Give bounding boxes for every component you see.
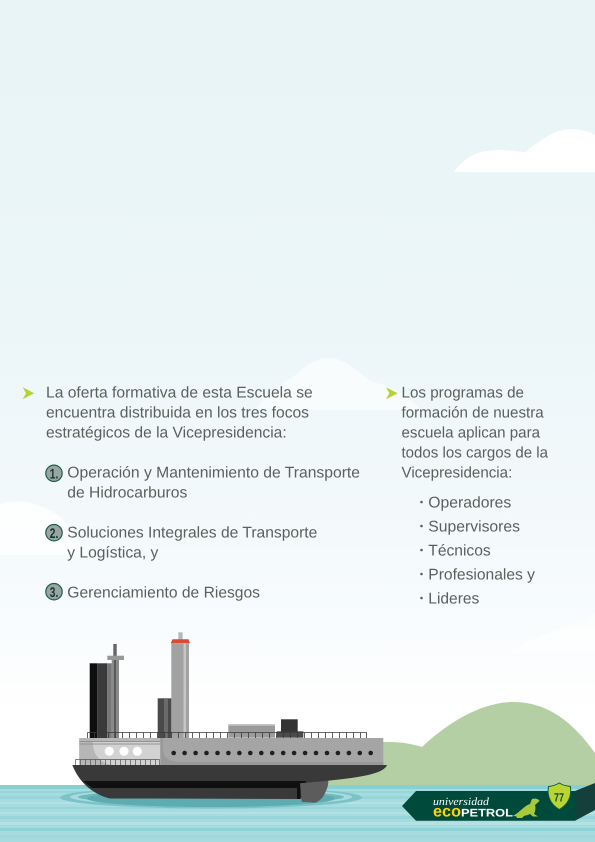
roles list: Supervisores <box>428 519 520 536</box>
intro paragraph: La oferta formativa de esta Escuela se <box>46 384 313 402</box>
item 1: Operación y Mantenimiento de Transporte <box>67 465 360 482</box>
arrow bullet right <box>386 387 398 399</box>
hull <box>72 765 387 799</box>
item 2 <box>46 524 317 561</box>
roles list: Profesionales y <box>428 567 535 584</box>
upper railing <box>88 732 366 738</box>
item 1 <box>46 465 360 502</box>
programs paragraph: formación de nuestra <box>402 405 544 422</box>
logo wordmark eco: eco <box>433 804 461 821</box>
roles list: Lideres <box>428 591 479 608</box>
superstructure <box>79 738 383 765</box>
water <box>0 785 595 842</box>
intro paragraph <box>46 384 313 442</box>
intro paragraph: encuentra distribuida en los tres focos <box>46 404 309 422</box>
lower railing <box>76 760 160 765</box>
item 2: 2. <box>50 525 58 541</box>
logo band <box>402 783 595 821</box>
shield badge 77 <box>548 783 571 810</box>
item 3: Gerenciamiento de Riesgos <box>67 584 260 601</box>
arrow bullet left <box>23 387 34 399</box>
tower: grey chimney with red cap <box>158 632 190 738</box>
programs paragraph: escuela aplican para <box>402 425 540 442</box>
item 2: y Logística, y <box>67 544 158 561</box>
programs paragraph: todos los cargos de la <box>402 445 548 462</box>
item 2: Soluciones Integrales de Transporte <box>67 524 317 541</box>
row of small windows <box>171 751 373 755</box>
hill <box>320 702 595 790</box>
programs paragraph <box>402 385 548 482</box>
logo script: universidad <box>433 796 490 808</box>
icon: iguana <box>513 799 540 818</box>
item 1: 1. <box>50 466 58 482</box>
hull black stripe <box>83 781 306 788</box>
ripples <box>60 786 362 808</box>
programs paragraph: Vicepresidencia: <box>402 465 512 482</box>
text block: left column <box>23 384 360 601</box>
text block: right column <box>386 385 548 608</box>
item 3: 3. <box>50 584 58 600</box>
clouds <box>0 129 595 653</box>
programs paragraph: Los programas de <box>402 385 524 402</box>
roles list: Operadores <box>428 495 511 512</box>
item 1: de Hidrocarburos <box>67 485 187 502</box>
portholes <box>105 747 142 756</box>
logo wordmark petrol: PETROL <box>461 808 513 820</box>
rudder <box>300 781 328 803</box>
intro paragraph: estratégicos de la Vicepresidencia: <box>46 424 287 442</box>
tower: black funnel and mast <box>90 644 124 738</box>
roles list <box>420 495 535 608</box>
shield badge 77: 77 <box>554 790 564 804</box>
ship <box>72 632 387 803</box>
deck boxes <box>228 719 303 738</box>
roles list: Técnicos <box>428 543 491 560</box>
